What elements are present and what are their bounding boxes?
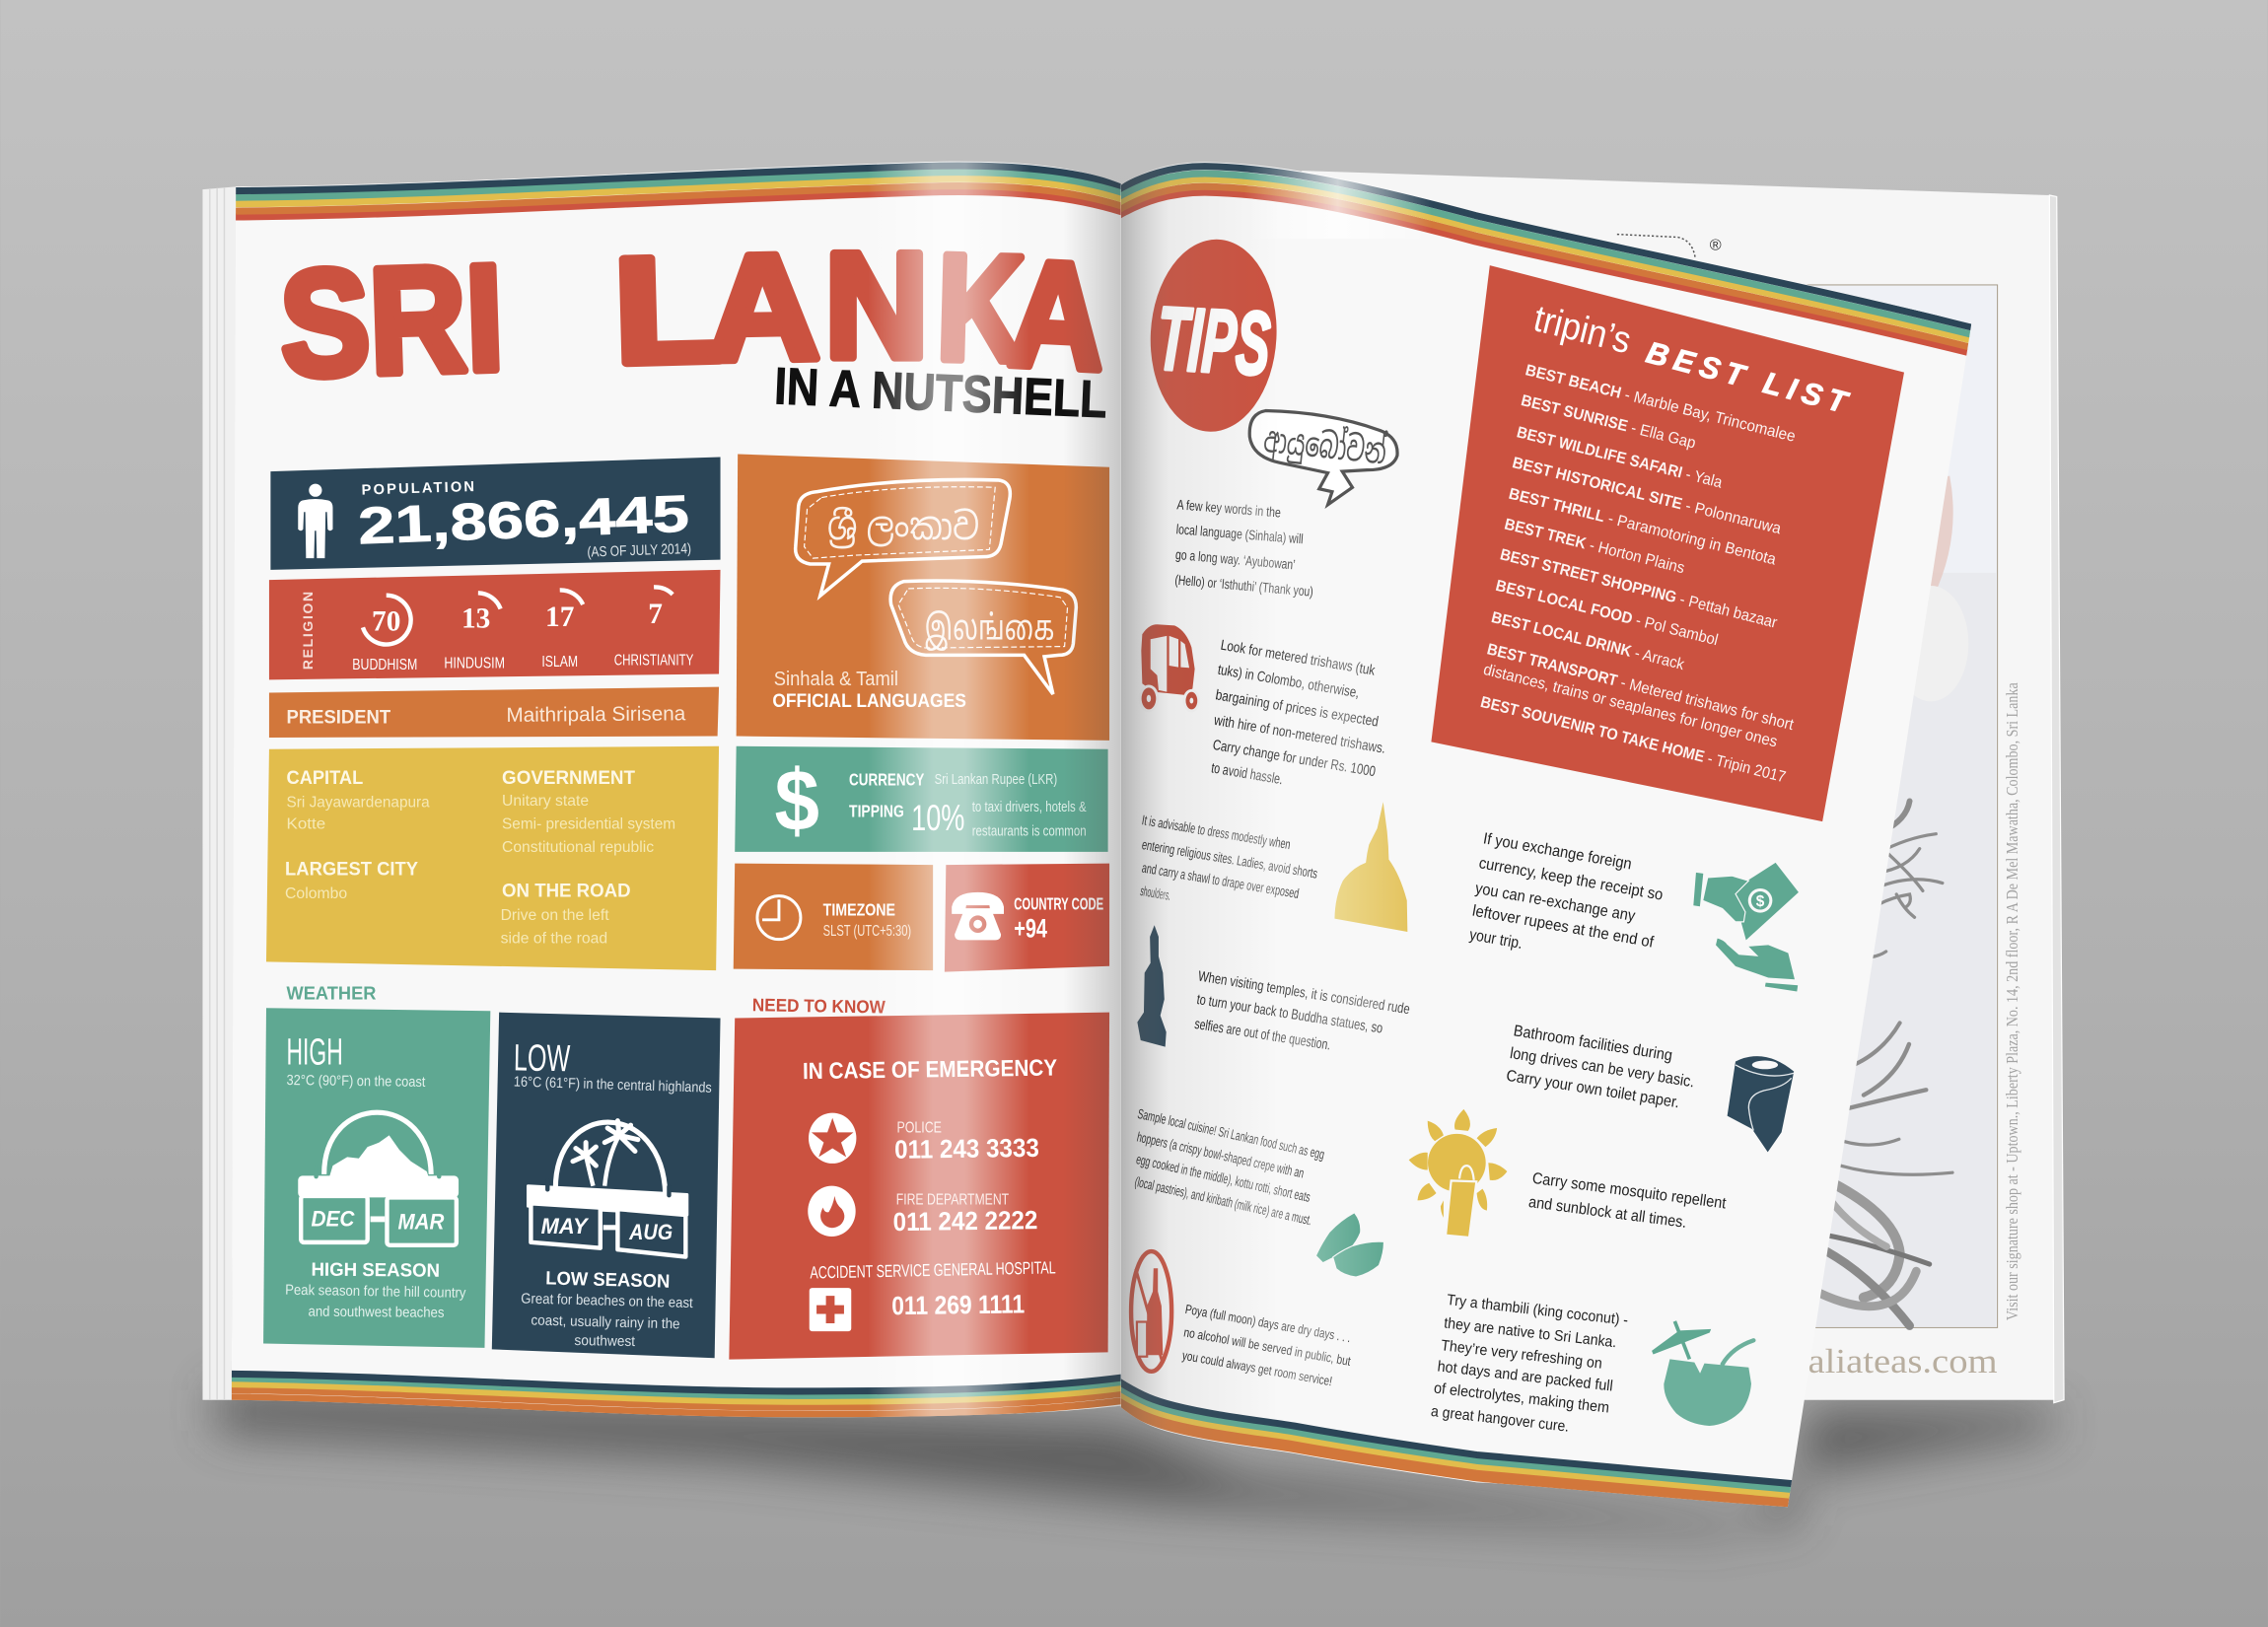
tipping text: to taxi drivers, hotels & xyxy=(972,800,1087,815)
top band gloss xyxy=(1248,166,1427,233)
title word LANKA: A xyxy=(1005,230,1109,402)
top rainbow band xyxy=(232,166,1128,217)
panel: population xyxy=(270,457,721,570)
panel: low season xyxy=(492,1013,721,1358)
chart: islam ring xyxy=(541,590,583,671)
tip: mosquito xyxy=(1527,1169,1728,1232)
fire department xyxy=(892,1191,1038,1237)
title word LANKA: N xyxy=(824,222,929,389)
chart: christianity ring: 7 xyxy=(648,599,663,630)
panel: official languages xyxy=(737,455,1109,741)
government: Constitutional republic xyxy=(502,839,654,856)
panel background xyxy=(269,687,719,738)
tip: exchange: currency, keep the receipt so xyxy=(1477,854,1665,904)
panel background xyxy=(492,1013,721,1358)
speech bubble: Tamil: இலங்கை xyxy=(924,608,1054,651)
dotted logo arc xyxy=(1617,235,1695,257)
on the road: ON THE ROAD xyxy=(502,881,631,901)
best list title xyxy=(1529,297,1852,420)
icon: calendar with palm trees xyxy=(528,1121,687,1257)
magazine shadow xyxy=(217,1388,2054,1533)
icon: fire xyxy=(808,1186,856,1237)
left page stack xyxy=(202,186,238,1400)
president name: Maithripala Sirisena xyxy=(506,702,686,727)
high season heading: HIGH SEASON xyxy=(311,1260,440,1282)
bottom rainbow band xyxy=(1113,1379,1794,1507)
tip: trishaws: tuks) in Colombo, otherwise, xyxy=(1217,663,1361,701)
icon: calendar with mountain: MAR xyxy=(397,1210,444,1235)
tip: exchange: If you exchange foreign xyxy=(1482,829,1633,873)
best list items: BEST HISTORICAL SITE - Polonnaruwa xyxy=(1511,454,1783,537)
icon: leaves xyxy=(1316,1214,1383,1277)
tip: dress modestly: entering religious sites. Ladies, avoid shorts xyxy=(1141,836,1318,882)
on the road: side of the road xyxy=(501,930,607,947)
tip: mosquito: and sunblock at all times. xyxy=(1527,1193,1687,1232)
on the road xyxy=(501,881,631,947)
icon: buddha xyxy=(1137,925,1167,1047)
panel background xyxy=(945,864,1109,972)
police: POLICE xyxy=(896,1118,942,1136)
icon: calendar with palm trees: MAY xyxy=(541,1214,590,1238)
tipping text xyxy=(849,798,1087,840)
best list items: BEST STREET SHOPPING - Pettah bazaar xyxy=(1498,545,1780,632)
icon: police star xyxy=(809,1113,856,1164)
photo lower area xyxy=(1801,573,1996,1327)
gloss over left page xyxy=(868,162,1029,1417)
best list items xyxy=(1479,361,1798,786)
tip: trishaws: with hire of non-metered trishaws. xyxy=(1212,713,1386,757)
high temperature: 32°C (90°F) on the coast xyxy=(286,1073,425,1091)
tip: thambili xyxy=(1430,1292,1629,1436)
panel: country facts xyxy=(266,746,719,970)
best list items: BEST LOCAL DRINK - Arrack xyxy=(1490,608,1687,673)
best list items: BEST SUNRISE - Ella Gap xyxy=(1520,391,1697,453)
panel: timezone xyxy=(734,864,933,970)
title word LANKA: K xyxy=(935,224,1027,393)
best list items: BEST LOCAL FOOD - Pol Sambol xyxy=(1494,577,1720,649)
back page paper xyxy=(1302,171,2063,1400)
icon: calendar with palm trees: AUG xyxy=(628,1220,673,1244)
icon: money exchange xyxy=(1693,863,1799,992)
tip: poya days: you could always get room service! xyxy=(1181,1348,1333,1388)
title word LANKA: L xyxy=(611,225,726,395)
icon: calendar with mountain: DEC xyxy=(311,1207,356,1232)
low season text xyxy=(521,1291,693,1350)
tip: trishaws: Look for metered trishaws (tuk xyxy=(1220,638,1377,679)
currency text: Sri Lankan Rupee (LKR) xyxy=(935,772,1057,788)
icon: telephone xyxy=(952,892,1004,940)
tipping text: restaurants is common xyxy=(972,824,1087,840)
low season text: coast, usually rainy in the xyxy=(531,1312,680,1332)
tip: local cuisine xyxy=(1133,1105,1326,1228)
country code text: +94 xyxy=(1014,913,1047,943)
tip: local cuisine: Sample local cuisine! Sri Lankan food such as egg xyxy=(1136,1105,1326,1163)
currency text xyxy=(849,769,1057,789)
chart: buddhism ring xyxy=(352,596,417,673)
panel background xyxy=(1431,265,1904,821)
panel: president xyxy=(269,687,719,738)
speech bubble: Sinhala xyxy=(796,479,1010,596)
registered mark: ® xyxy=(1710,237,1722,254)
low season text: Great for beaches on the east xyxy=(521,1291,693,1311)
religion label: RELIGION xyxy=(300,592,316,670)
panel background xyxy=(737,455,1109,741)
speech bubble: Ayubowan xyxy=(1249,411,1397,505)
tip: mosquito: Carry some mosquito repellent xyxy=(1531,1169,1728,1213)
best list title: tripin’s xyxy=(1529,297,1635,362)
chart: buddhism ring: BUDDHISM xyxy=(352,657,417,673)
bottom rainbow band xyxy=(232,1374,1128,1414)
tip: temples xyxy=(1193,969,1411,1054)
tip: thambili: a great hangover cure. xyxy=(1430,1403,1570,1436)
currency text: CURRENCY xyxy=(849,769,925,789)
chart: buddhism ring: 70 xyxy=(372,605,400,637)
top rainbow band xyxy=(1113,167,1981,356)
low heading: LOW xyxy=(514,1036,571,1080)
website text: aliateas.com xyxy=(1807,1342,1998,1380)
tip: bathroom: Carry your own toilet paper. xyxy=(1505,1067,1680,1111)
capital xyxy=(287,768,430,832)
president label: PRESIDENT xyxy=(287,707,390,728)
page paper xyxy=(232,162,1121,1417)
population date: (AS OF JULY 2014) xyxy=(587,541,691,561)
tip: dress modestly xyxy=(1139,812,1318,903)
tip: bathroom: Bathroom facilities during xyxy=(1513,1022,1673,1065)
emergency heading: IN CASE OF EMERGENCY xyxy=(803,1055,1058,1084)
photo frame xyxy=(1620,285,1998,1327)
tips text: TIPS xyxy=(1155,289,1272,394)
panel background xyxy=(266,746,719,970)
tip: exchange xyxy=(1468,829,1665,953)
best list items: BEST TREK - Horton Plains xyxy=(1503,515,1686,577)
low temperature: 16°C (61°F) in the central highlands xyxy=(514,1074,712,1096)
title word SRI: SRI xyxy=(278,234,506,408)
tip: key words: local language (Sinhala) will xyxy=(1175,521,1304,546)
subtitle: IN A NUTSHELL xyxy=(773,357,1108,429)
chart: hinduism ring: 13 xyxy=(461,603,490,635)
icon: stupa xyxy=(1334,802,1407,932)
chart: islam ring: 17 xyxy=(545,601,574,633)
timezone text: SLST (UTC+5:30) xyxy=(823,923,911,940)
panel: best list xyxy=(1431,265,1904,821)
police xyxy=(894,1118,1039,1165)
best list title: BEST LIST xyxy=(1643,335,1852,420)
tips badge xyxy=(1146,237,1281,435)
on the road: Drive on the left xyxy=(501,907,609,924)
panel: religion xyxy=(269,570,721,679)
tip: poya days xyxy=(1181,1302,1352,1388)
best list items: BEST SOUVENIR TO TAKE HOME - Tripin 2017 xyxy=(1479,693,1788,786)
tip: local cuisine: hoppers (a crispy bowl-shaped crepe with an xyxy=(1136,1129,1306,1181)
tip: exchange: leftover rupees at the end of xyxy=(1471,902,1656,952)
pink plant bud xyxy=(1880,476,1953,607)
icon: no alcohol xyxy=(1131,1251,1171,1372)
low season text: southwest xyxy=(574,1333,635,1350)
icon: dollar: $ xyxy=(775,751,819,849)
panel background xyxy=(735,746,1108,852)
best list items: BEST THRILL - Paramotoring in Bentota xyxy=(1507,485,1778,569)
tip: local cuisine: (local pastries), and kiribath (milk rice) are a must. xyxy=(1133,1173,1313,1228)
panel background xyxy=(729,1013,1109,1360)
title word LANKA: A xyxy=(705,223,820,392)
pale shell xyxy=(1893,586,1968,701)
high season text: and southwest beaches xyxy=(308,1305,444,1321)
tip: trishaws xyxy=(1210,638,1386,788)
languages caption: Sinhala & Tamil xyxy=(774,668,898,690)
panel: country code xyxy=(945,864,1109,972)
capital: Sri Jayawardenapura xyxy=(287,794,430,811)
icon: tuk tuk xyxy=(1139,624,1200,712)
tip: bathroom: long drives can be very basic. xyxy=(1509,1044,1696,1091)
page edges xyxy=(2049,195,2064,1403)
chart: christianity ring: CHRISTIANITY xyxy=(614,653,693,670)
tip: poya days: Poya (full moon) days are dry days . . . xyxy=(1184,1302,1352,1345)
hospital heading: ACCIDENT SERVICE GENERAL HOSPITAL xyxy=(810,1257,1056,1283)
tip: local cuisine: egg cooked in the middle), kottu rotti, short eats xyxy=(1135,1151,1311,1205)
speech bubble: Tamil xyxy=(890,581,1076,694)
panel: high season xyxy=(263,1008,490,1348)
largest city xyxy=(285,859,418,902)
high season text xyxy=(285,1283,466,1321)
tip: thambili: they are native to Sri Lanka. xyxy=(1443,1314,1617,1351)
hospital number: 011 269 1111 xyxy=(891,1289,1025,1320)
tip: dress modestly: shoulders. xyxy=(1139,883,1171,903)
icon: sun with repellent xyxy=(1409,1109,1507,1238)
tip: trishaws: Carry change for under Rs. 1000 xyxy=(1212,738,1377,780)
capital: Kotte xyxy=(287,815,325,832)
icon: first aid xyxy=(810,1288,851,1331)
speech bubble: Ayubowan: ආයුබෝවන් xyxy=(1262,417,1388,473)
panel background xyxy=(734,864,933,970)
best list items: BEST TRANSPORT - Metered trishaws for short xyxy=(1485,640,1796,734)
government: Semi- presidential system xyxy=(502,815,675,832)
tip: exchange: your trip. xyxy=(1468,926,1524,953)
icon: person xyxy=(298,484,332,558)
high heading: HIGH xyxy=(287,1030,343,1073)
tip: poya days: no alcohol will be served in public, but xyxy=(1182,1324,1352,1369)
tip: trishaws: bargaining of prices is expected xyxy=(1214,687,1380,731)
tip: key words: A few key words in the xyxy=(1176,496,1282,521)
panel background xyxy=(269,570,721,679)
country code text: COUNTRY CODE xyxy=(1014,894,1103,914)
panel background xyxy=(270,457,721,570)
tip: thambili: hot days and are packed full xyxy=(1437,1358,1614,1395)
fire department: 011 242 2222 xyxy=(892,1205,1038,1237)
heading: weather: WEATHER xyxy=(287,982,376,1003)
plant drawing xyxy=(1810,801,1952,1325)
tipping text: 10% xyxy=(911,798,964,838)
icon: calendar with mountain xyxy=(298,1112,459,1245)
country code text xyxy=(1014,894,1103,943)
government: Unitary state xyxy=(502,793,589,810)
tip: key words: go a long way. ‘Ayubowan’ xyxy=(1175,546,1296,572)
speech bubble: Sinhala: ශ්‍රී ලංකාව xyxy=(827,506,979,548)
page paper xyxy=(1121,162,1971,1507)
title word LANKA xyxy=(611,222,1109,402)
tip: thambili: of electrolytes, making them xyxy=(1433,1379,1610,1417)
right page xyxy=(1113,152,1981,1507)
tip: thambili: Try a thambili (king coconut) - xyxy=(1446,1292,1629,1329)
icon: clock xyxy=(757,896,801,940)
heading: need to know: NEED TO KNOW xyxy=(752,994,886,1018)
back page xyxy=(1302,171,2064,1403)
best list items: distances, trains or seaplanes for longer ones xyxy=(1481,661,1779,751)
best list items: BEST BEACH - Marble Bay, Trincomalee xyxy=(1524,361,1798,446)
panel background xyxy=(263,1008,490,1348)
title xyxy=(278,222,1109,408)
icon: toilet paper xyxy=(1728,1056,1794,1152)
tip: trishaws: to avoid hassle. xyxy=(1210,760,1284,788)
government xyxy=(502,768,675,856)
vertical address text: Visit our signature shop at - Uptown., Liberty Plaza, No. 14, 2nd floor, R A De Mel Mawatha, Colombo, Sri Lanka xyxy=(2003,682,2021,1320)
stacked paper xyxy=(202,186,238,1400)
tip: bathroom xyxy=(1505,1022,1696,1111)
tip: temples: When visiting temples, it is considered rude xyxy=(1197,969,1411,1018)
tip: key words: (Hello) or ‘Isthuthi’ (Thank you) xyxy=(1174,572,1313,600)
chart: hinduism ring xyxy=(444,593,505,672)
languages heading: OFFICIAL LANGUAGES xyxy=(772,690,966,712)
population label: POPULATION xyxy=(361,479,474,499)
tip: thambili: They’re very refreshing on xyxy=(1440,1337,1603,1373)
tips circle xyxy=(1146,237,1281,435)
spine shade left xyxy=(1073,172,1121,1410)
government: GOVERNMENT xyxy=(502,768,635,789)
best list items: BEST WILDLIFE SAFARI - Yala xyxy=(1515,423,1724,492)
panel: currency xyxy=(735,746,1108,852)
low season heading: LOW SEASON xyxy=(545,1268,671,1293)
high season text: Peak season for the hill country xyxy=(285,1283,466,1302)
paper lines xyxy=(210,188,224,1400)
chart: hinduism ring: HINDUSIM xyxy=(444,656,505,672)
left page xyxy=(232,162,1128,1417)
spine shade right xyxy=(1121,162,1217,1440)
capital: CAPITAL xyxy=(287,768,364,789)
panel: emergency xyxy=(729,1013,1109,1360)
tip: dress modestly: It is advisable to dress modestly when xyxy=(1141,812,1292,852)
fire department: FIRE DEPARTMENT xyxy=(896,1191,1009,1209)
tipping text: TIPPING xyxy=(849,802,904,821)
tip: temples: selfies are out of the question. xyxy=(1193,1017,1331,1054)
tip: exchange: you can re-exchange any xyxy=(1474,880,1637,925)
timezone text xyxy=(823,899,911,940)
tip: temples: to turn your back to Buddha statues, so xyxy=(1195,992,1383,1037)
largest city: LARGEST CITY xyxy=(285,859,418,880)
tip: key words xyxy=(1174,496,1313,600)
chart: christianity ring xyxy=(614,587,693,670)
icon: money exchange: $ xyxy=(1756,893,1765,910)
largest city: Colombo xyxy=(285,885,347,902)
chart: islam ring: ISLAM xyxy=(541,654,578,671)
timezone text: TIMEZONE xyxy=(823,899,895,919)
population number: 21,866,445 xyxy=(357,485,690,555)
icon: coconut xyxy=(1652,1321,1753,1426)
police: 011 243 3333 xyxy=(894,1133,1039,1165)
tip: dress modestly: and carry a shawl to drape over exposed xyxy=(1141,860,1301,901)
